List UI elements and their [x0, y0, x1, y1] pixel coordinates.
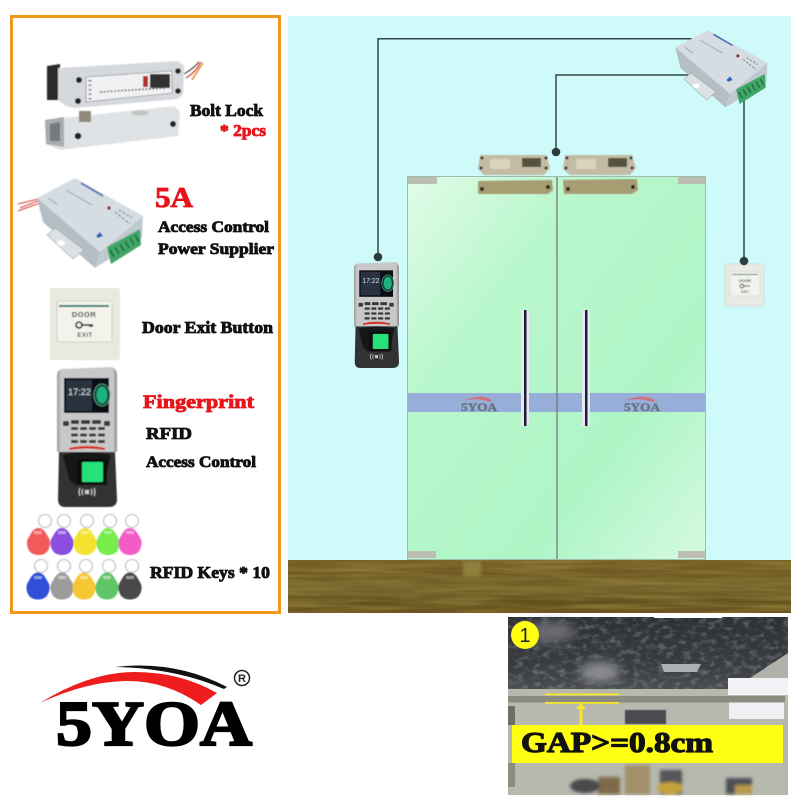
icon: door exit button: [50, 288, 120, 360]
door beam: [508, 696, 785, 702]
blue band: [408, 393, 705, 412]
icon: RFID key fobs: [26, 514, 142, 600]
circle number: 1: [519, 625, 531, 647]
icon: power supply: [18, 178, 143, 268]
icon: fingerprint terminal: 17:22: [68, 387, 91, 398]
watermark right: [624, 397, 661, 414]
logo: 5YOA: [40, 666, 252, 759]
wire: terminal to power supply: [374, 39, 692, 261]
icon: terminal in diagram: [354, 262, 399, 368]
icon: door exit button: EXIT: [77, 333, 93, 339]
panel: gap photo: [508, 616, 788, 795]
dark patch: [625, 710, 666, 724]
text: RFID: RFID: [146, 424, 192, 443]
watermark left: 5YOA: [461, 402, 498, 414]
text: fingerprint: Fingerprint: [143, 392, 255, 413]
yellow callout: GAP>=0.8cm: [521, 727, 713, 759]
icon: exit button in diagram: DOOR: [739, 278, 751, 283]
wire: exit button to power supply: [740, 100, 748, 265]
icon: exit button in diagram: [725, 264, 764, 306]
text: access control: Access Control: [146, 454, 257, 471]
icon: exit button in diagram: EXIT: [741, 290, 750, 294]
text: RFID keys: RFID Keys * 10: [150, 563, 270, 582]
icon: left bolt lock: [478, 155, 553, 194]
door handle left: [521, 310, 529, 426]
watermark right: 5YOA: [624, 402, 661, 414]
text: access control: Access Control: [158, 219, 270, 236]
icon: door exit button: DOOR: [72, 310, 96, 319]
wire: locks to power supply: [552, 75, 690, 156]
icon: terminal in diagram: 17:22: [362, 277, 380, 285]
icon: right bolt lock: [563, 155, 638, 194]
text: power supplier: Power Supplier: [158, 241, 274, 258]
ceiling reflections: [525, 622, 620, 682]
text: bolt lock: Bolt Lock: [190, 101, 264, 120]
icon: fingerprint terminal: [57, 367, 117, 507]
logo swoosh red: [40, 672, 217, 705]
glass doors: [408, 176, 706, 560]
floor: [288, 560, 791, 613]
circle number: [511, 621, 539, 649]
text: quantity: * 2pcs: [220, 121, 266, 140]
text: 5A: 5A: [155, 183, 194, 214]
logo wordmark: 5YOA: [56, 688, 252, 759]
icon: bolt lock: [45, 61, 203, 150]
panel: kit contents: [12, 16, 280, 612]
text: door exit button: Door Exit Button: [142, 318, 273, 337]
logo registered mark: [234, 670, 250, 686]
door handle right: [582, 310, 590, 426]
panel: installation diagram: [288, 16, 791, 613]
watermark left: [461, 397, 498, 414]
gap marker lines and arrow: [545, 694, 619, 726]
yellow callout: [512, 725, 783, 763]
logo swoosh black: [115, 666, 227, 689]
icon: power supply in diagram: [675, 30, 767, 107]
clutter at bottom: [570, 765, 752, 794]
hinges: [408, 177, 705, 558]
white panels: [728, 678, 788, 695]
logo registered mark: R: [238, 673, 246, 685]
